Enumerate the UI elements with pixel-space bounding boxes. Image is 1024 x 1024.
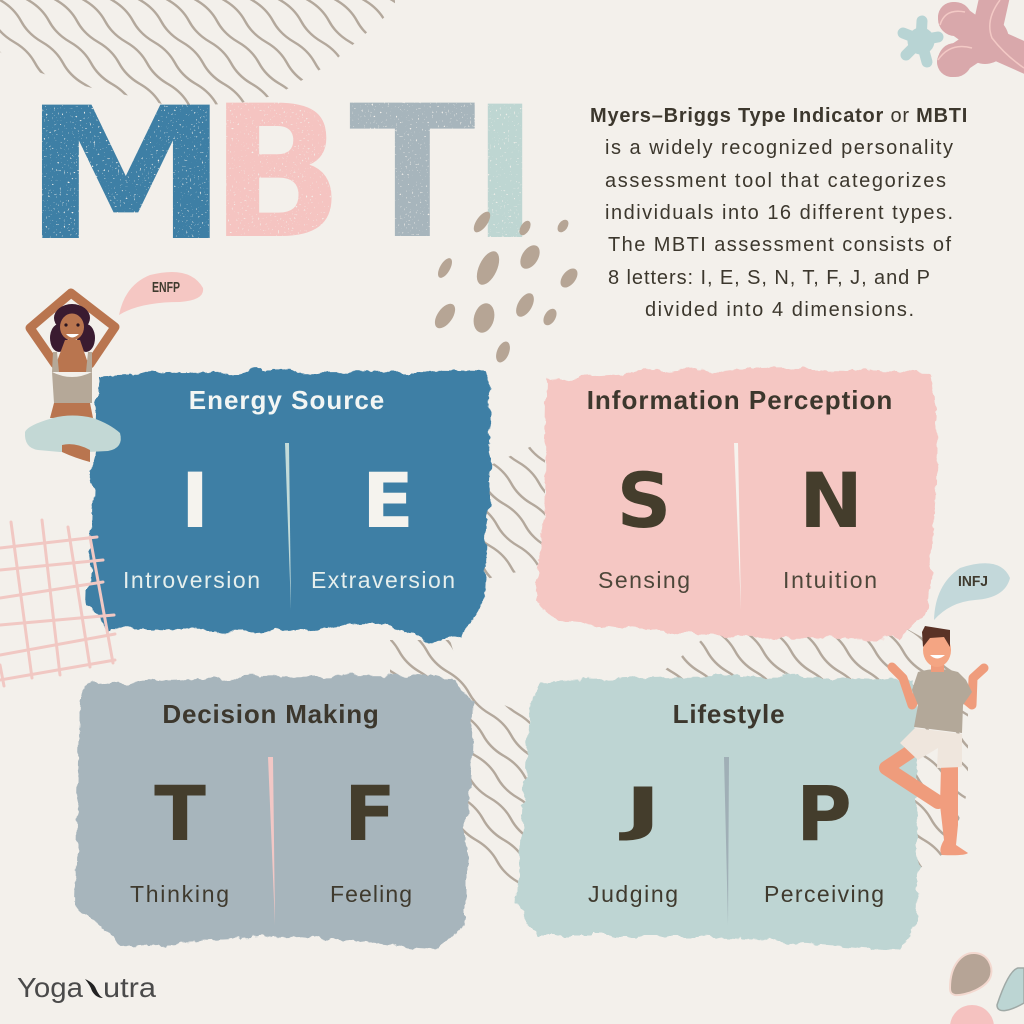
speech bubble: INFJ (934, 563, 1010, 620)
logo: YogaSutra: utra (103, 972, 156, 1003)
icon: teal star blob (903, 21, 938, 62)
letter J: J (619, 776, 661, 843)
title: MBTI: M (23, 69, 229, 282)
divider (285, 443, 291, 610)
card background grey (75, 676, 472, 950)
letter P: P (796, 769, 852, 858)
title: MBTI: I (471, 68, 539, 281)
label thinking: Thinking (130, 881, 229, 907)
card background teal (517, 676, 918, 950)
panel: lifestyle (517, 676, 918, 950)
heading: information perception: Information Perception (587, 385, 893, 415)
speech bubble: ENFP: ENFP (152, 279, 180, 296)
wave pattern: centre (390, 640, 530, 895)
intro text block: 8 letters: I, E, S, N, T, F, J, and P (608, 267, 930, 289)
logo: YogaSutra: Yoga (17, 972, 83, 1003)
intro text block: The MBTI assessment consists of (608, 234, 951, 256)
wave pattern: right (650, 625, 968, 880)
label intuition: Intuition (783, 567, 877, 593)
wave pattern: between top cards (478, 440, 545, 582)
intro text block: assessment tool that categorizes (605, 170, 946, 192)
logo: YogaSutra (17, 972, 156, 1003)
label extraversion: Extraversion (311, 567, 455, 593)
title: MBTI (23, 67, 539, 282)
panel: information perception (535, 369, 938, 640)
decorative brown dots (431, 209, 581, 364)
title: MBTI: B (210, 68, 344, 280)
card background pink (535, 369, 938, 640)
title: MBTI: T (349, 67, 476, 280)
intro text block: Myers–Briggs Type Indicator or MBTI (590, 105, 968, 127)
label perceiving: Perceiving (764, 881, 884, 907)
icon: pebbles (950, 953, 1024, 1024)
label introversion: Introversion (123, 567, 260, 593)
letter S: S (617, 456, 671, 545)
decorative pink grid (0, 520, 115, 686)
speech bubble: INFJ: INFJ (958, 573, 988, 590)
divider (724, 757, 729, 925)
intro text block: individuals into 16 different types. (605, 202, 953, 224)
illustration: woman in yoga pose (25, 293, 121, 462)
panel: energy source (88, 371, 490, 642)
letter I: I (181, 456, 209, 545)
letter E: E (362, 456, 414, 545)
heading: decision making: Decision Making (162, 699, 380, 729)
divider (268, 757, 275, 925)
wave pattern: top left (0, 0, 395, 107)
speech bubble: ENFP (119, 272, 203, 315)
intro text block: divided into 4 dimensions. (645, 299, 914, 321)
label judging: Judging (588, 881, 678, 907)
letter T: T (154, 769, 206, 858)
intro text block (590, 105, 968, 321)
heading: energy source: Energy Source (189, 385, 385, 415)
label sensing: Sensing (598, 567, 690, 593)
divider (734, 443, 741, 610)
icon: pink blob (938, 0, 1024, 77)
card background blue (88, 371, 490, 642)
panel: decision making (75, 676, 472, 950)
letter F: F (344, 769, 396, 858)
intro text block: is a widely recognized personality (605, 137, 953, 159)
illustration: man in tree pose (886, 626, 984, 855)
letter N: N (799, 456, 863, 545)
label feeling: Feeling (330, 881, 412, 907)
heading: lifestyle: Lifestyle (673, 699, 785, 729)
